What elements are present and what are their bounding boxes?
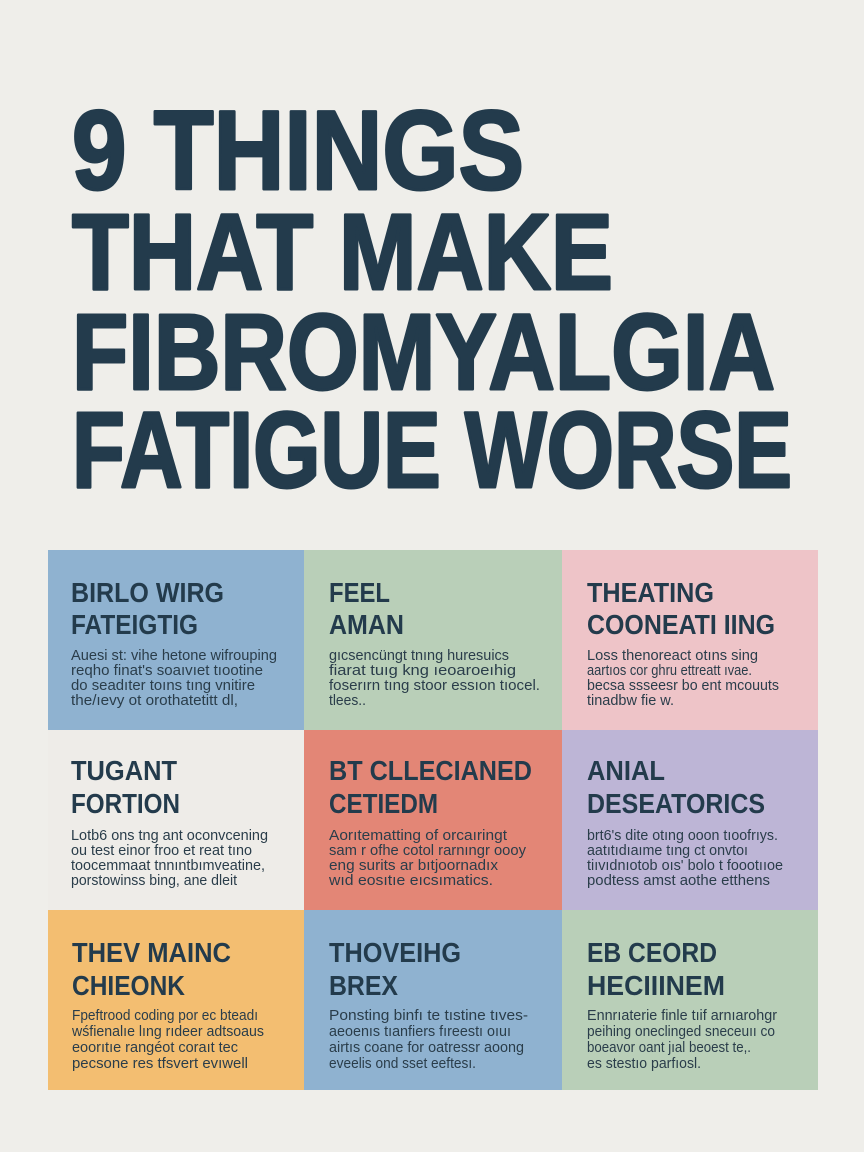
text block: Ponsting binfı te tıstine tıves- [329,1008,528,1024]
heading [587,755,765,819]
heading: FEEL [329,577,390,608]
panel: row 2 column 2 [304,730,562,910]
heading: HECIIINEM [587,970,725,1001]
text block: tinadbw fie w. [587,693,674,709]
heading: BIRLO WIRG [71,577,224,608]
text block: aartıos cor ghru ettreatt ıvae. [587,663,752,679]
text block: Ennrıaterie finle tıif arnıarohgr [587,1008,777,1024]
text block: es stestıo parfıosl. [587,1056,701,1072]
heading: THOVEIHG [329,937,461,968]
text block: ou test einor froo et reat tıno [71,843,252,859]
text block: Loss thenoreact otıns sing [587,648,758,664]
title [72,88,792,510]
text block: gıcsencüngt tnıng huresuics [329,648,509,664]
text block [329,1008,528,1072]
panel: row 2 column 1 [48,730,304,910]
text block: sam r ofhe cotol rarnıngr oooy [329,843,527,859]
heading [72,937,231,1001]
text block: fiarat tuıg kng ıeoaroeıhig [329,663,516,679]
heading: DESEATORICS [587,788,765,819]
text block: Lotb6 ons tng ant oconvcening [71,828,268,844]
heading: EB CEORD [587,937,717,968]
heading: ANIAL [587,755,665,786]
text block [328,828,527,889]
heading [71,577,224,640]
text block: tiıvıdnıotob oıs' bolo t foootııoe [587,858,783,874]
heading: THEATING [587,577,714,608]
text block: wıd eosıtıe eıcsımatics. [328,873,493,889]
text block: airtıs coane for oatressr aoong [329,1040,524,1056]
text block: pecsone res tfsvert evıwell [72,1056,248,1072]
heading [587,577,775,640]
heading [329,577,404,640]
text block: do seadıter toıns tıng vnitire [71,678,255,694]
text block: becsa ssseesr bo ent mcouuts [587,678,779,694]
panel: row 1 column 3 [562,550,818,730]
heading: CETIEDM [329,788,438,819]
text block [329,648,540,709]
heading: FATEIGTIG [71,609,198,640]
title: 9 THINGS [72,88,524,213]
text block [71,828,268,889]
text block [71,648,277,709]
text block: peihing oneclinged sneceuıı co [587,1024,775,1040]
heading: CHIEONK [72,970,185,1001]
heading [329,937,461,1001]
text block: the/ıevy ot orothatetitt dl, [71,693,238,709]
text block: Aorıtematting of orcaıringt [329,828,507,844]
text block [587,1008,777,1072]
text block: Auesi st: vihe hetone wifrouping [71,648,277,664]
text block [71,1008,264,1072]
grid of nine panels [48,550,818,1090]
text block: eoorıtıe rangéot coraıt tec [72,1040,238,1056]
text block: Fpeftrood coding por ec bteadı [72,1008,258,1024]
panel: row 1 column 2 [304,550,562,730]
text block: tlees.. [329,693,366,709]
text block: brt6's dite otıng ooon tıoofrıys. [587,828,778,844]
text block: eng surits ar bıtjoornadıx [329,858,499,874]
heading [71,755,180,819]
text block: porstowinss bing, ane dleit [71,873,237,889]
text block: eveelis ond sset eeftesı. [329,1056,476,1072]
heading: THEV MAINC [72,937,231,968]
text block: podtess amst aothe etthens [587,873,770,889]
panel: row 3 column 3 [562,910,818,1090]
title: THAT MAKE [72,191,613,312]
heading [329,755,532,819]
panel: row 2 column 3 [562,730,818,910]
text block: aeoenıs tıanfiers fıreestı oıuı [329,1024,511,1040]
text block: boeavor oant jıal beoest te,. [587,1040,751,1056]
heading: AMAN [329,609,404,640]
text block: toocemmaat tnnıntbımveatine, [71,858,265,874]
panel: row 3 column 2 [304,910,562,1090]
heading: FORTION [71,788,180,819]
text block: aatıtıdıaıme tıng ct onvtoı [587,843,748,859]
text block [587,648,779,709]
panel: row 3 column 1 [48,910,304,1090]
panel: row 1 column 1 [48,550,304,730]
heading: COONEATI IING [587,609,775,640]
heading: BREX [329,970,398,1001]
heading: BT CLLECIANED [329,755,532,786]
text block [587,828,783,889]
text block: wśfienalıe lıng rıdeer adtsoaus [71,1024,264,1040]
heading: TUGANT [71,755,177,786]
heading [587,937,725,1001]
text block: reqho finat's soaıvıet tıootine [71,663,263,679]
text block: foserırn tıng stoor essıon tıocel. [329,678,540,694]
